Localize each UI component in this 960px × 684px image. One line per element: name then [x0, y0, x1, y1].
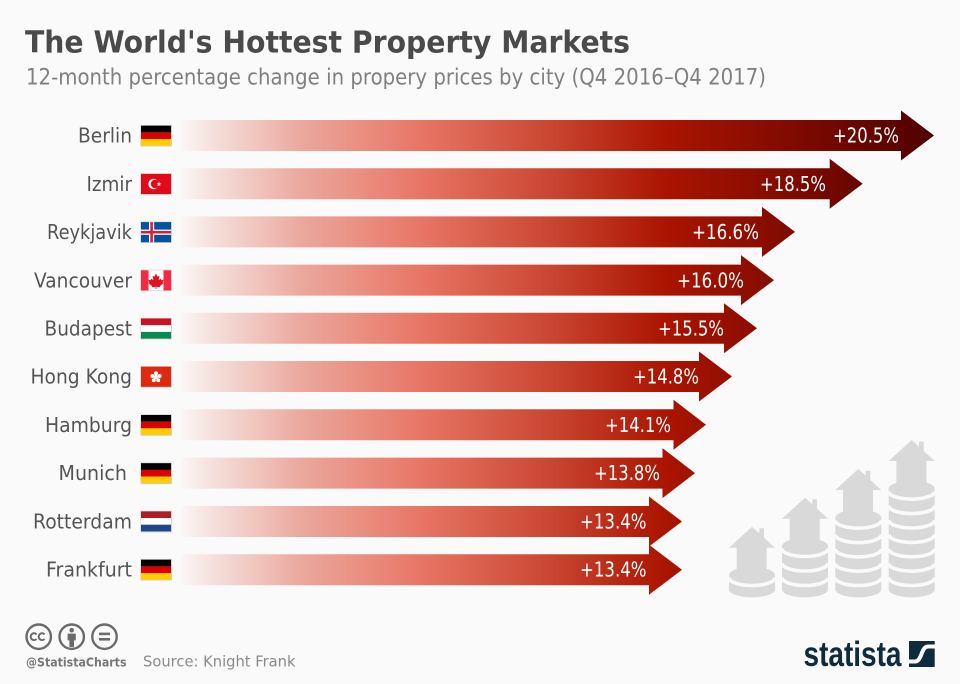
flag: Hong Kong [140, 366, 172, 388]
flag: Hungary [140, 318, 172, 339]
arrow: +14.8% [180, 352, 732, 402]
arrow: +18.5% [180, 159, 863, 209]
value: +13.4% [580, 509, 646, 533]
arrow: +13.4% [180, 545, 682, 595]
arrow: +13.8% [180, 448, 695, 498]
row: Budapest [44, 303, 757, 353]
arrow: +15.5% [180, 303, 757, 353]
flag: Iceland [140, 222, 172, 243]
flag: Germany [140, 414, 172, 436]
value: +13.8% [594, 461, 660, 485]
value: +20.5% [833, 124, 899, 148]
arrow: +20.5% [180, 110, 934, 160]
logo: statista wordmark: statista [804, 635, 902, 674]
icon: houses on rising coin stacks [729, 440, 935, 597]
flag: Netherlands [140, 511, 172, 532]
icon: no derivatives [92, 624, 117, 649]
value: +13.4% [580, 558, 646, 582]
icon: stack 3 [835, 469, 881, 597]
value: +16.0% [677, 268, 744, 292]
label: Reykjavik: Reykjavik [47, 220, 132, 244]
label: Vancouver: Vancouver [34, 268, 133, 292]
flag: Germany [140, 125, 172, 146]
row: Hong Kong [30, 352, 732, 402]
icon: stack 1 [729, 527, 775, 597]
logo: statista mark [907, 641, 936, 667]
flag: Germany [140, 559, 172, 580]
icon: creative commons licence [26, 624, 117, 649]
arrow: +16.6% [180, 207, 795, 257]
label: Rotterdam: Rotterdam [33, 509, 132, 533]
label: Berlin: Berlin [78, 124, 132, 148]
arrow: +14.1% [180, 400, 706, 450]
label: Hamburg: Hamburg [45, 413, 132, 437]
arrow: +13.4% [180, 496, 682, 546]
label: Frankfurt: Frankfurt [46, 558, 132, 582]
title: The World's Hottest Property Markets [25, 26, 630, 61]
row: Berlin [78, 110, 934, 160]
value: +15.5% [658, 316, 724, 340]
row: Vancouver [34, 255, 774, 305]
subtitle: 12-month percentage change in propery prices by city (Q4 2016–Q4 2017) [26, 66, 766, 90]
value: +16.6% [692, 220, 759, 244]
value: +18.5% [760, 172, 826, 196]
icon: stack 2 [782, 498, 828, 597]
value: +14.8% [633, 365, 699, 389]
row: Rotterdam [33, 496, 682, 546]
row: Reykjavik [47, 207, 795, 257]
row: Frankfurt [46, 545, 682, 595]
icon: attribution [59, 624, 84, 649]
label: Hong Kong: Hong Kong [30, 365, 132, 389]
source: Source: Knight Frank [143, 652, 296, 670]
arrow: +16.0% [180, 255, 774, 305]
icon: cc [26, 624, 51, 649]
label: Budapest: Budapest [44, 316, 132, 340]
label: Munich: Munich [58, 461, 127, 485]
flag: Canada [140, 270, 172, 291]
label: Izmir: Izmir [86, 172, 133, 196]
row: Hamburg [45, 400, 706, 450]
row: Izmir [86, 159, 863, 209]
row: Munich [58, 448, 695, 498]
flag: Germany [140, 463, 172, 484]
credit handle: @StatistaCharts [26, 656, 126, 670]
flag: Turkey [140, 173, 172, 195]
value: +14.1% [605, 413, 671, 437]
icon: stack 4 [889, 440, 935, 597]
